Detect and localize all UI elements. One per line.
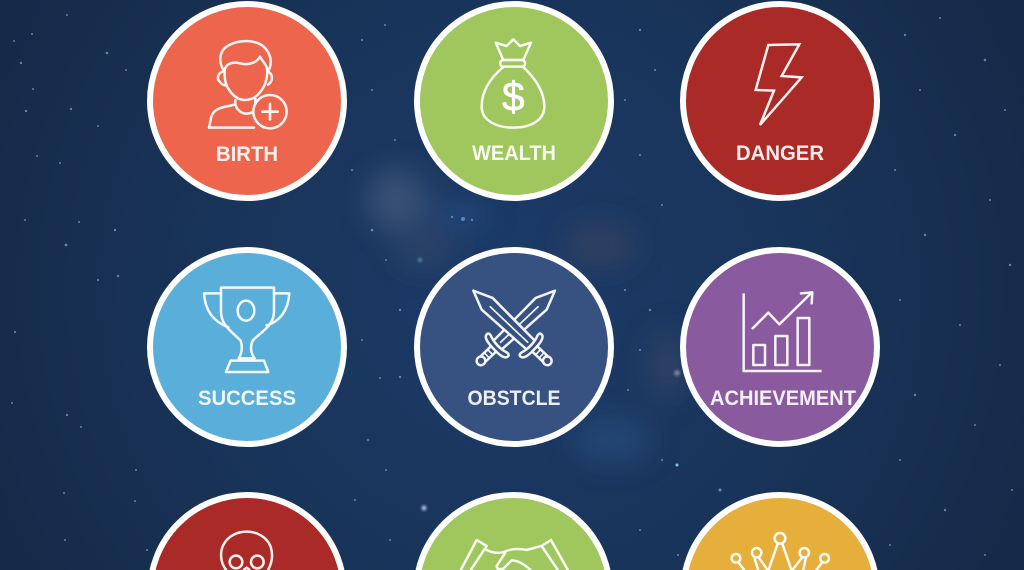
label: achievement: ACHIEVEMENT: [710, 387, 856, 410]
badge: wealth: [417, 4, 611, 198]
label: danger: DANGER: [736, 142, 824, 165]
icon: crown: [732, 533, 829, 570]
icon: money bag: $: [502, 73, 525, 119]
badge: birth: [150, 4, 344, 198]
badge: death: [150, 495, 344, 570]
icon: skull: [221, 532, 272, 570]
icon: person with plus: [209, 41, 287, 128]
label: success: SUCCESS: [198, 387, 296, 410]
badge: achievement: [683, 250, 877, 444]
badge: obstacle: [417, 250, 611, 444]
icon: lightning bolt: [756, 44, 802, 125]
label: obstcle: OBSTCLE: [468, 387, 560, 410]
badge: crown: [683, 495, 877, 570]
label: birth: BIRTH: [216, 143, 278, 166]
icon: rising bar chart: [744, 292, 822, 371]
icon: money bag: [482, 39, 544, 128]
label: wealth: WEALTH: [472, 142, 556, 165]
badge: danger: [683, 4, 877, 198]
badge: success: [150, 250, 344, 444]
icon: crossed swords: [463, 280, 566, 375]
badge: alliance: [416, 495, 610, 570]
icon: handshake: [461, 540, 568, 570]
icon: trophy: [204, 288, 289, 372]
